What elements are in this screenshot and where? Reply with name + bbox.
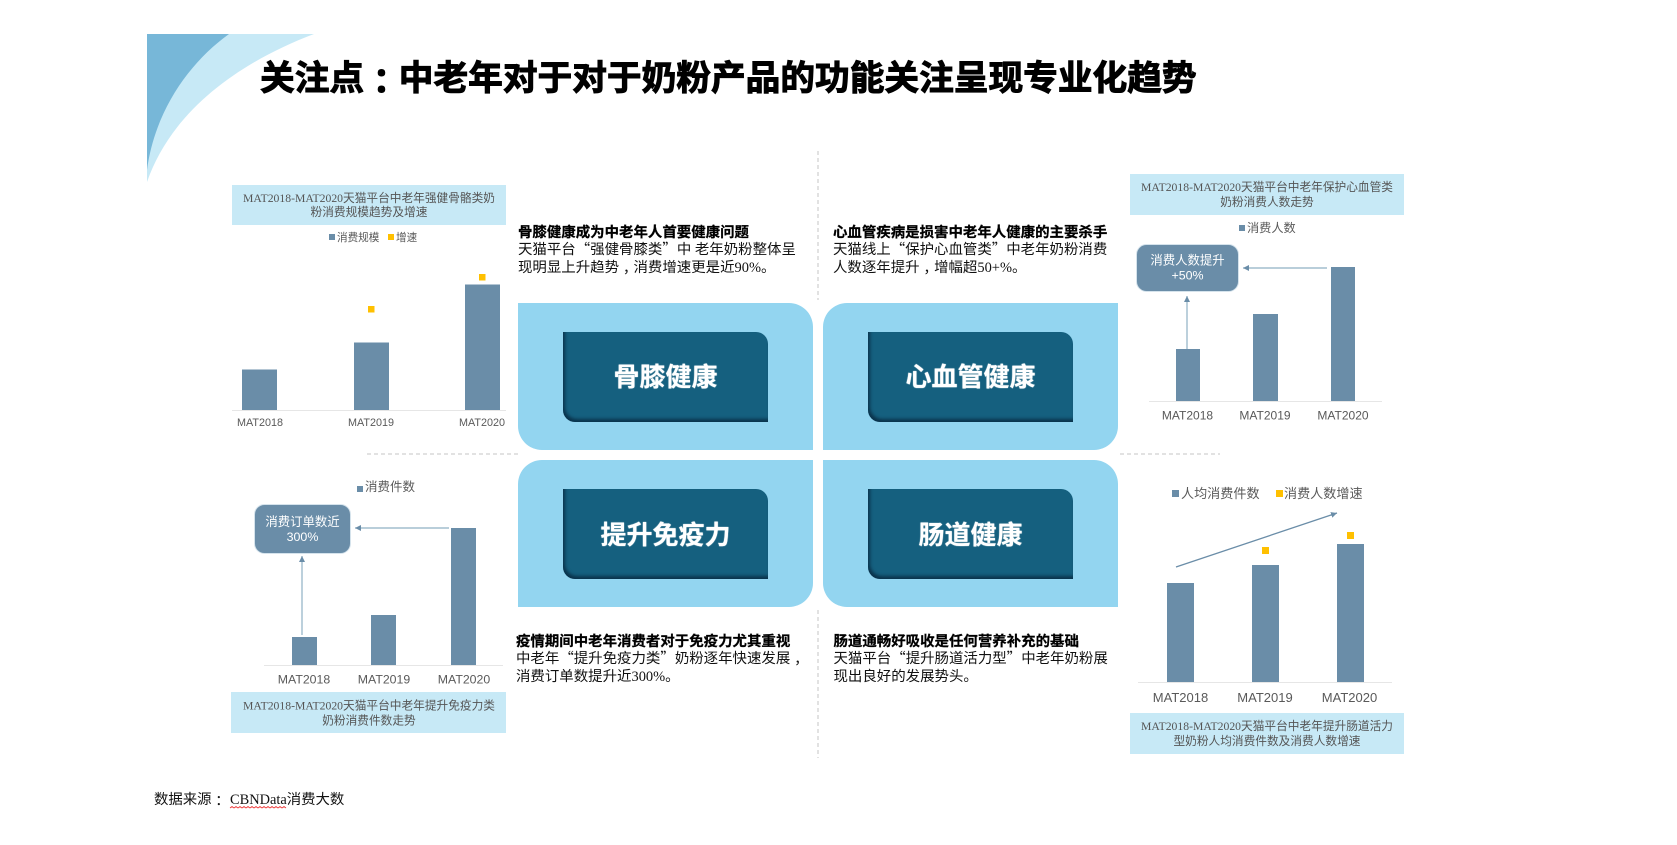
text block: immunity: 中老年“提升免疫力类”奶粉逐年快速发展 xyxy=(516,647,790,668)
title: ： xyxy=(364,54,399,104)
bars xyxy=(1176,267,1355,401)
text block: cardiovascular: 天猫线上“保护心血管类”中老年奶粉消费 xyxy=(833,238,1107,259)
label: 提升免疫力 xyxy=(563,489,768,579)
data source footer: CBNData消费大数 xyxy=(230,791,344,808)
legend: 消费人数增速 xyxy=(1284,486,1363,501)
label: 骨膝健康: 骨膝健康 xyxy=(613,362,718,392)
chart caption xyxy=(1130,174,1404,215)
axis labels: MAT2019 xyxy=(348,417,394,429)
axis labels: MAT2019 xyxy=(358,672,410,686)
text block: cardiovascular xyxy=(833,223,1107,282)
panel: bone and knee health xyxy=(518,303,813,450)
text block: bone and knee: 骨膝健康成为中老年人首要健康问题 xyxy=(518,223,750,241)
legend: 消费人数 xyxy=(1247,220,1296,235)
text block: cardiovascular: ， xyxy=(920,261,934,282)
chart: gut xyxy=(1130,486,1404,754)
corner decoration xyxy=(147,34,314,182)
legend xyxy=(1172,486,1363,501)
label: 提升免疫力: 提升免疫力 xyxy=(600,520,730,550)
text block: cardiovascular: 增幅超50+%。 xyxy=(934,259,1026,276)
growth markers xyxy=(1262,532,1354,554)
axis labels: MAT2019 xyxy=(1237,690,1293,705)
title: 中老年对于对于奶粉产品的功能关注呈现专业化趋势 xyxy=(399,59,1197,98)
chart caption xyxy=(232,185,506,225)
text block: bone and knee: 消费增速更是近90%。 xyxy=(634,259,775,276)
axis labels: MAT2018 xyxy=(278,672,330,686)
arrow: to callout left xyxy=(355,527,449,529)
chart caption xyxy=(1130,713,1404,754)
axis labels: MAT2019 xyxy=(1239,408,1291,422)
data source footer: ： xyxy=(212,790,226,811)
text block: immunity: 疫情期间中老年消费者对于免疫力尤其重视 xyxy=(516,632,791,650)
text block: gut: 肠道通畅好吸收是任何营养补充的基础 xyxy=(834,632,1079,650)
label: 肠道健康 xyxy=(868,489,1073,579)
callout: +50% xyxy=(1171,268,1204,282)
axis labels: MAT2018 xyxy=(237,417,283,429)
callout: 300% xyxy=(287,530,318,544)
arrow: rising trend xyxy=(1176,513,1337,567)
axis labels xyxy=(237,417,505,429)
callout: 消费订单数近 xyxy=(265,514,340,529)
chart: immunity xyxy=(231,479,506,733)
panel: immunity xyxy=(518,460,813,607)
callout: 消费人数提升 xyxy=(1150,252,1225,268)
axis labels: MAT2020 xyxy=(459,417,505,429)
chart: bone and knee xyxy=(232,185,506,429)
text block: immunity: 消费订单数提升近300%。 xyxy=(516,668,680,685)
text block: cardiovascular: 人数逐年提升 xyxy=(833,260,920,276)
chart caption: 奶粉消费件数走势 xyxy=(322,714,416,728)
text block: bone and knee: 现明显上升趋势 xyxy=(518,260,619,276)
bars xyxy=(1167,544,1364,682)
chart caption: MAT2018-MAT2020天猫平台中老年提升免疫力类 xyxy=(243,698,495,712)
label: 骨膝健康 xyxy=(563,332,768,422)
data source footer: 数据来源 xyxy=(154,792,212,808)
panel: gut health xyxy=(823,460,1118,607)
chart caption xyxy=(231,692,506,733)
chart caption: MAT2018-MAT2020天猫平台中老年强健骨骼类奶 xyxy=(243,191,495,205)
text block: immunity: ， xyxy=(790,652,805,673)
axis labels xyxy=(278,672,490,686)
chart caption: MAT2018-MAT2020天猫平台中老年提升肠道活力 xyxy=(1141,719,1393,733)
label: 心血管健康 xyxy=(868,332,1073,422)
axis labels: MAT2018 xyxy=(1153,690,1208,705)
chart caption: 粉消费规模趋势及增速 xyxy=(311,205,428,219)
bars xyxy=(242,284,500,410)
axis labels xyxy=(1162,408,1369,422)
chart caption: 型奶粉人均消费件数及消费人数增速 xyxy=(1173,734,1361,748)
text block: bone and knee xyxy=(518,223,796,282)
bars xyxy=(292,528,476,665)
arrow: to callout left xyxy=(1243,267,1327,269)
text block: gut: 现出良好的发展势头。 xyxy=(834,668,978,685)
title: 关注点 xyxy=(260,60,364,98)
text block: gut: 天猫平台“提升肠道活力型”中老年奶粉展 xyxy=(834,647,1108,668)
text block: cardiovascular: 心血管疾病是损害中老年人健康的主要杀手 xyxy=(833,223,1107,241)
label: 心血管健康: 心血管健康 xyxy=(905,362,1036,392)
data source footer xyxy=(154,790,344,811)
chart caption: 奶粉消费人数走势 xyxy=(1220,195,1314,209)
legend xyxy=(329,231,418,244)
legend: 消费件数 xyxy=(365,479,416,494)
callout xyxy=(254,504,350,554)
chart: cardiovascular xyxy=(1130,174,1404,422)
axis labels: MAT2020 xyxy=(1322,690,1377,705)
arrow: to callout up xyxy=(301,556,303,635)
axis labels: MAT2020 xyxy=(438,672,490,686)
legend: 消费规模 xyxy=(337,231,380,244)
label: 肠道健康: 肠道健康 xyxy=(918,520,1022,550)
panel: cardiovascular health xyxy=(823,303,1118,450)
text block: bone and knee: 天猫平台“强健骨膝类”中 老年奶粉整体呈 xyxy=(518,238,796,259)
axis labels: MAT2020 xyxy=(1317,408,1369,422)
text block: immunity xyxy=(516,632,805,685)
text block: gut xyxy=(834,632,1108,685)
arrow: to callout up xyxy=(1186,296,1188,349)
growth markers xyxy=(368,274,486,312)
callout xyxy=(1136,244,1238,292)
legend: 人均消费件数 xyxy=(1181,486,1260,501)
legend: 增速 xyxy=(396,231,418,244)
axis labels xyxy=(1153,690,1377,705)
chart caption: MAT2018-MAT2020天猫平台中老年保护心血管类 xyxy=(1141,180,1393,194)
text block: bone and knee: ， xyxy=(619,261,634,282)
axis labels: MAT2018 xyxy=(1162,408,1213,422)
